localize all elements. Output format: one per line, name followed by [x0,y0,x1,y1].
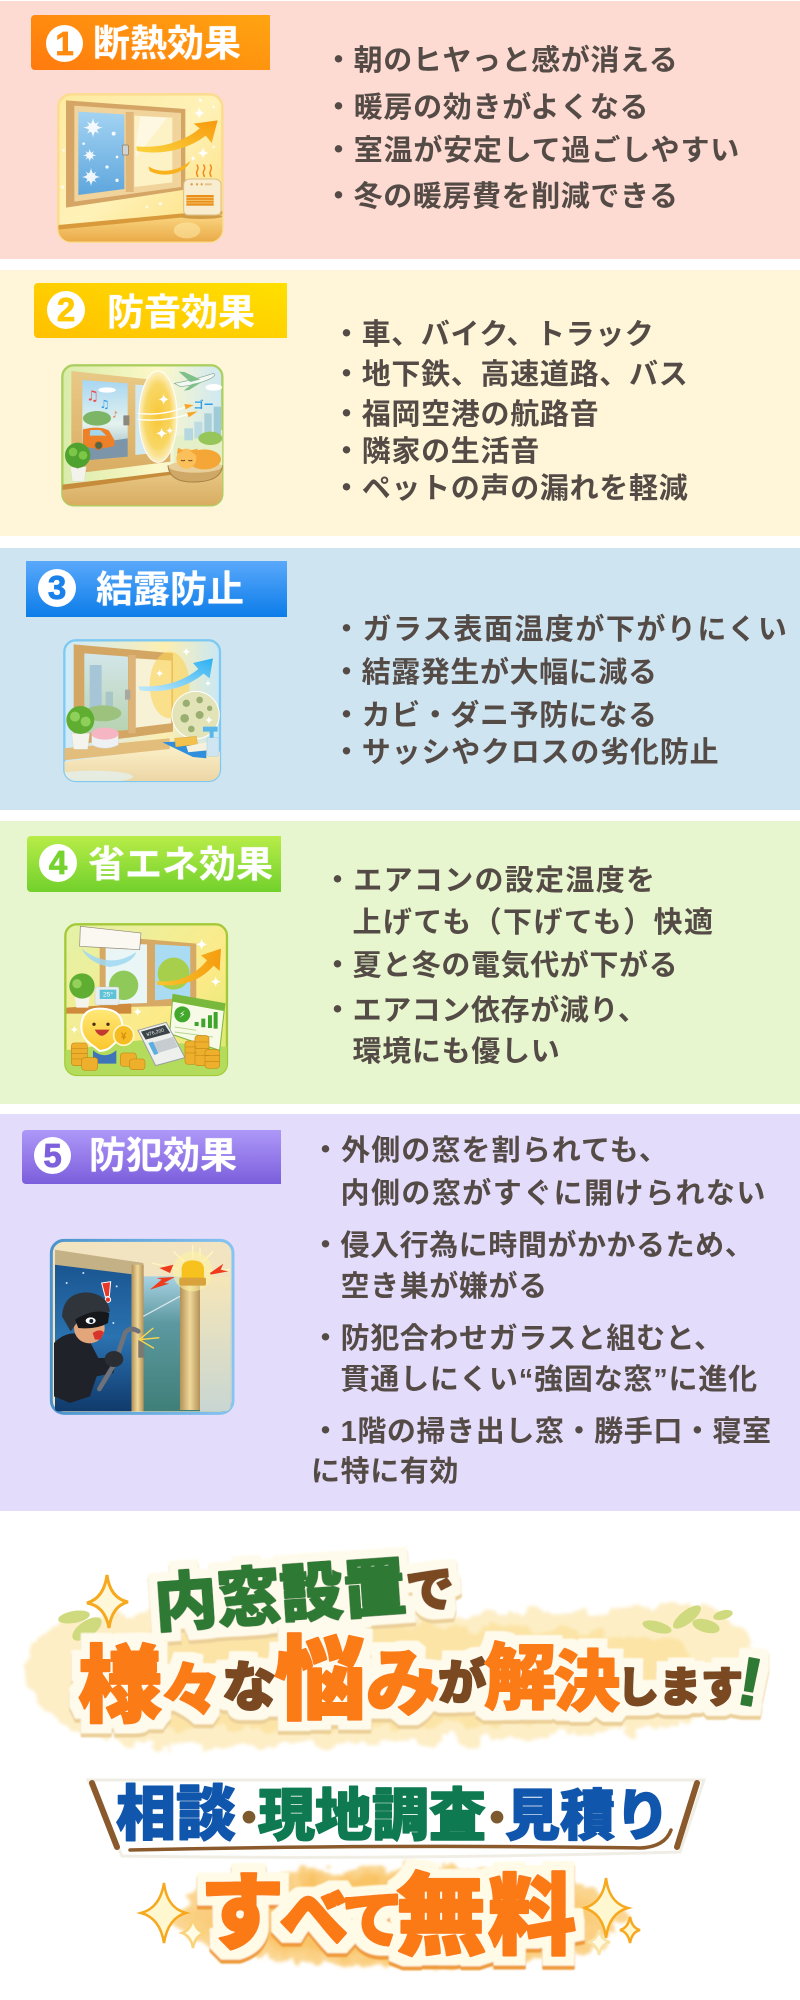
coin stacks [72,1035,220,1070]
text block: 防犯 benefits: に特に有効 [311,1456,459,1488]
heading: 様々な悩みが解決します！: 悩 [274,1630,366,1732]
banner: 相談・現地調査・見積り: 見積り [505,1785,670,1847]
bulb mascot: ¥ [121,1031,127,1042]
heading: すべて無料: て [342,1887,404,1956]
heater [179,165,222,219]
heading: すべて無料: 料 [488,1867,576,1966]
text block: 結露 benefits: ・カビ・ダニ予防になる [332,700,658,732]
text block: 防音 benefits [332,319,688,505]
exclamation mark [102,1282,111,1303]
text block: 結露 benefits: ・ガラス表面温度が下がりにくい [332,614,788,646]
heading: 防音効果: 防音効果 [107,292,255,333]
text block: 断熱 benefits: ・暖房の効きがよくなる [324,92,649,124]
heading: 断熱効果: 1 [55,25,74,62]
heading: 防音効果: 2 [57,291,75,328]
text block: 防犯 benefits: ・外側の窓を割られても、 [311,1135,669,1167]
text block: 省エネ benefits: 上げても（下げても）快適 [352,907,714,939]
potted plant [65,443,90,481]
music notes: ♫ [86,389,99,405]
window frame [66,100,185,207]
heading: すべて無料: す [200,1866,284,1960]
icon: burglar at a window with alarm light [50,1238,234,1415]
text block: 省エネ benefits: ・エアコンの設定温度を [323,865,656,897]
rising arrow [157,948,221,985]
heading: 省エネ効果 [27,836,281,892]
heat arrows [136,120,217,152]
heading: 様々な悩みが解決します！: 決 [554,1645,620,1719]
icon: condensation prevention window [63,639,222,782]
cleaning cloth, sponge and spray [163,727,219,758]
heading: 様々な悩みが解決します！: ! [732,1643,768,1722]
banner: bottom call to action [22,1546,770,1972]
text block: 防犯 benefits: 内側の窓がすぐに開けられない [340,1178,767,1210]
text block: 省エネ benefits: ・エアコン依存が減り、 [323,995,647,1027]
music notes: ♫ [99,397,110,411]
bill chart: ⚡ [179,1009,186,1020]
panel: 省エネ効果 [0,821,800,1104]
text block: 断熱 benefits: ・冬の暖房費を削減できる [324,181,679,213]
panel: 断熱効果 [0,1,800,259]
pink dehumidifier box [92,728,119,748]
heading: 様々な悩みが解決します！: な [222,1658,276,1718]
bill chart [170,994,225,1050]
window [100,935,197,1007]
heading: 結露防止 [26,561,287,617]
heading: 省エネ効果: 4 [49,844,67,881]
ゴー label: ゴー [193,398,213,411]
icon: soundproof window with sleeping cat [61,364,224,506]
orange glow [170,1867,626,1967]
text block: 省エネ benefits: 環境にも優しい [352,1036,560,1068]
heading: 防犯効果: 防犯効果 [89,1135,237,1176]
mold circle [172,691,220,739]
heading: 断熱効果: 断熱効果 [93,23,241,64]
text block: 防犯 benefits [311,1135,772,1488]
calculator: ¥76,200 [146,1027,165,1038]
cat in basket [168,448,222,482]
heading: 内窓設置で: で [404,1563,456,1620]
alarm light [150,1245,230,1292]
heading: 内窓設置で: 内窓設置 [152,1553,408,1640]
sideboard, plant and thermostat [67,973,132,1013]
banner: 相談・現地調査・見積り: ・ [477,1797,517,1841]
text block: 防犯 benefits: 空き巣が嫌がる [340,1271,548,1303]
panel: 結露防止 [0,548,800,810]
text block: 結露 benefits [332,614,788,769]
text block: 省エネ benefits [323,865,714,1068]
text block: 防音 benefits: ・隣家の生活音 [332,436,540,468]
text block: 防音 benefits: ・車、バイク、トラック [332,319,654,351]
banner: 相談・現地調査・見積り: 現地調査 [258,1784,486,1848]
heading: すべて無料: 無 [396,1867,486,1967]
heading: 様々な悩みが解決します！: 々 [160,1657,222,1726]
text block: 結露 benefits: ・サッシやクロスの劣化防止 [332,737,719,769]
heading: 様々な悩みが解決します！: します [617,1664,743,1711]
sparkles [141,1878,640,1955]
calculator [138,1022,185,1065]
icon: energy saving room with bulb mascot [64,923,228,1076]
yellow brush background [28,1605,758,1746]
panel: 防音効果 [0,270,800,536]
text block: 防犯 benefits: 貫通しにくい“強固な窓”に進化 [340,1364,758,1396]
reinforced frame post [180,1283,200,1410]
window frame [71,371,170,474]
airflow arrow [139,658,213,691]
heading: 防音効果 [34,283,287,338]
sash handle [138,1341,144,1358]
air conditioner [80,926,141,967]
heading: 防犯効果: 5 [43,1137,62,1174]
bulb mascot [82,1008,134,1063]
window frame [74,644,173,745]
burglar [54,1293,138,1403]
panel: 防犯効果 [0,1114,800,1511]
music notes [86,389,118,420]
text block: 断熱 benefits: ・朝のヒヤっと感が消える [324,45,678,77]
sideboard, plant and thermostat: 25° [103,990,114,998]
text block: 省エネ benefits: ・夏と冬の電気代が下がる [323,950,678,982]
potted plant [67,706,95,749]
heading: すべて無料: べ [280,1881,348,1957]
sound barrier bubble [139,371,177,462]
heading: 省エネ効果: 省エネ効果 [88,844,273,885]
heading: 様々な悩みが解決します！: 様 [78,1639,162,1733]
music notes: ♪ [112,410,118,420]
text block: 防犯 benefits: ・侵入行為に時間がかかるため、 [311,1230,754,1262]
text block: 防犯 benefits: ・防犯合わせガラスと組むと、 [311,1323,724,1355]
heading: 防犯効果 [22,1130,281,1184]
text block: 結露 benefits: ・結露発生が大幅に減る [332,657,658,689]
heading: 結露防止: 3 [48,569,66,606]
text block: 断熱 benefits [324,44,740,213]
heading: 断熱効果 [31,15,270,70]
text block: 防音 benefits: ・ペットの声の漏れを軽減 [332,473,688,505]
banner: 相談・現地調査・見積り: ・ [229,1797,269,1841]
heading: 様々な悩みが解決します！: が [438,1656,486,1710]
airplane [174,372,214,391]
banner: 相談・現地調査・見積り [88,1780,704,1857]
heading: 様々な悩みが解決します！: み [366,1642,440,1725]
text block: 断熱 benefits: ・室温が安定して過ごしやすい [324,135,740,167]
sparkle and leaves [57,1575,734,1645]
text block: 防音 benefits: ・福岡空港の航路音 [332,399,599,431]
banner: 相談・現地調査・見積り: 相談 [116,1781,236,1848]
icon: insulated window with heater [57,93,224,243]
heading: 様々な悩みが解決します！: 解 [484,1639,556,1719]
heading: 結露防止: 結露防止 [96,569,244,610]
text block: 防音 benefits: ・地下鉄、高速道路、バス [332,359,688,391]
text block: 防犯 benefits: ・1階の掃き出し窓・勝手口・寝室 [311,1416,772,1448]
